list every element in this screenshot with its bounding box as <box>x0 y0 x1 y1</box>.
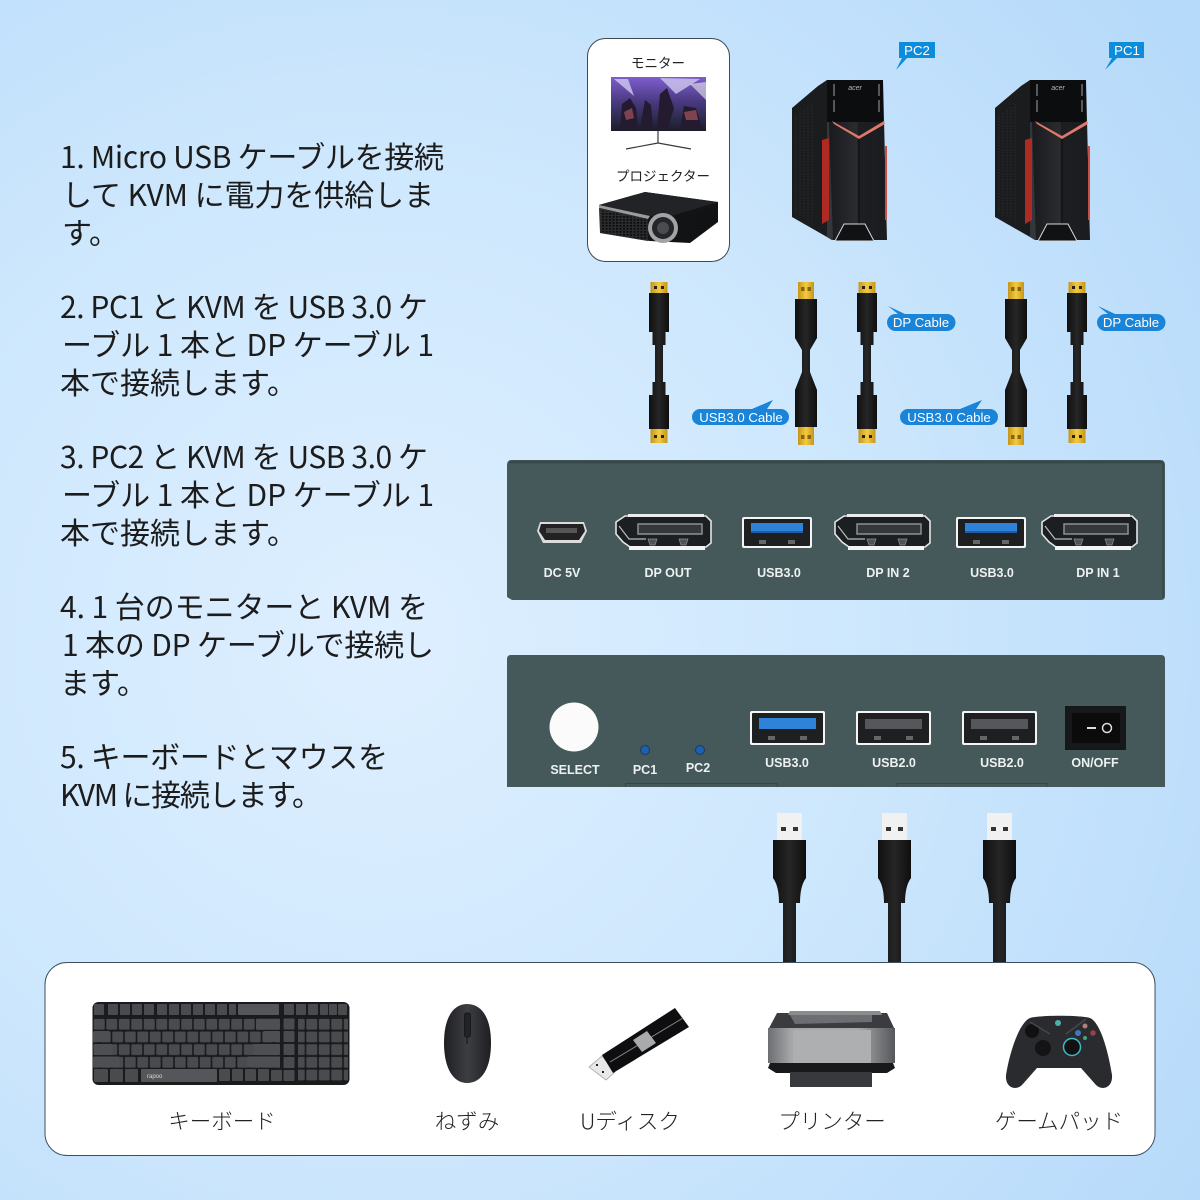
cable: DP to display <box>649 282 669 443</box>
panel: peripherals <box>45 962 1155 1156</box>
cable: DP PC2 <box>857 282 877 443</box>
port: DP OUT <box>616 514 711 550</box>
step 3: 本で接続します。 <box>60 509 297 553</box>
step 4: ます。 <box>60 659 147 703</box>
function keys <box>94 1004 347 1015</box>
label: USB2.0: USB2.0 <box>872 756 916 770</box>
button: select <box>550 702 598 752</box>
bottom row <box>94 1069 269 1082</box>
callout: DP Cable PC2 <box>887 306 956 331</box>
icon: PC1 tower <box>995 80 1090 241</box>
port: USB2.0 <box>856 711 931 745</box>
callout: USB3.0 Cable PC2: USB3.0 Cable <box>699 410 783 425</box>
label: PC2: PC2 <box>686 761 710 775</box>
step 3: 3. PC2 と KVM を USB 3.0 ケ <box>60 433 428 477</box>
port: micro USB <box>537 522 587 543</box>
callout: PC1 <box>1105 42 1144 70</box>
label: DP IN 1: DP IN 1 <box>1076 566 1120 580</box>
label: keyboard: キーボード <box>168 1105 276 1136</box>
label: DP OUT: DP OUT <box>644 566 692 580</box>
instructions text <box>60 133 444 815</box>
port: USB3.0 <box>750 711 825 745</box>
icon: mouse <box>444 1004 491 1083</box>
label: DP IN 2: DP IN 2 <box>866 566 910 580</box>
port: DP IN 1 <box>1042 514 1137 550</box>
icon: PC2 tower <box>792 80 887 241</box>
callout: PC1: PC1 <box>1114 43 1140 58</box>
callout: DP Cable PC1 <box>1097 306 1166 331</box>
label: printer: プリンター <box>778 1105 886 1136</box>
panel: display devices <box>588 38 730 262</box>
step 4: 4. 1 台のモニターと KVM を <box>60 583 428 627</box>
port: USB2.0 <box>962 711 1037 745</box>
cable: USB to peripherals 1 <box>773 813 806 963</box>
step 5: KVM に接続します。 <box>60 771 322 815</box>
LED: PC1 <box>640 746 650 754</box>
step 2: 本で接続します。 <box>60 359 297 403</box>
step 2 <box>60 283 434 403</box>
port: DP IN 2 <box>835 514 930 550</box>
icon: printer <box>768 1011 895 1087</box>
label: USB3.0: USB3.0 <box>757 566 801 580</box>
label: projector: プロジェクター <box>616 165 710 185</box>
step 4: 1 本の DP ケーブルで接続し <box>62 621 434 665</box>
cable: USB3.0 PC2 <box>795 282 817 445</box>
label: USB3.0: USB3.0 <box>970 566 1014 580</box>
label: USB3.0: USB3.0 <box>765 756 809 770</box>
callout: USB3.0 Cable PC1 <box>900 400 998 425</box>
LED: PC2 <box>696 746 704 754</box>
step 1 <box>60 133 444 253</box>
label: PC1: PC1 <box>633 763 657 777</box>
cable: USB3.0 PC1 <box>1005 282 1027 445</box>
icon: keyboard <box>92 1002 350 1085</box>
icon: gamepad <box>1006 1016 1112 1088</box>
icon: monitor <box>611 77 706 149</box>
keyboard brand: rapoo <box>147 1074 163 1080</box>
label: monitor: モニター <box>631 52 685 72</box>
label: SELECT: SELECT <box>550 763 600 777</box>
step 1: して KVM に電力を供給しま <box>62 171 434 215</box>
numeric keypad <box>298 1018 348 1082</box>
port: USB3.0 <box>742 517 812 548</box>
callout: DP Cable PC1: DP Cable <box>1103 315 1159 330</box>
step 5 <box>60 733 388 815</box>
step 3 <box>60 433 434 553</box>
panel: KVM front <box>507 655 1165 787</box>
icon: projector <box>599 192 718 243</box>
step 3: ーブル 1 本と DP ケーブル 1 <box>62 471 434 515</box>
callout: PC2 <box>896 42 935 70</box>
cable: DP PC1 <box>1067 282 1087 443</box>
step 1: す。 <box>62 209 119 253</box>
step 2: ーブル 1 本と DP ケーブル 1 <box>62 321 434 365</box>
callout: USB3.0 Cable PC2 <box>692 400 789 425</box>
callout: USB3.0 Cable PC1: USB3.0 Cable <box>907 410 991 425</box>
step 1: 1. Micro USB ケーブルを接続 <box>60 133 444 177</box>
step 2: 2. PC1 と KVM を USB 3.0 ケ <box>60 283 428 327</box>
main keys <box>93 1018 280 1069</box>
label: USB2.0: USB2.0 <box>980 756 1024 770</box>
port: USB3.0 <box>956 517 1026 548</box>
label: gamepad: ゲームパッド <box>995 1105 1123 1136</box>
label: ON/OFF: ON/OFF <box>1071 756 1119 770</box>
cable: USB to peripherals 2 <box>878 813 911 963</box>
cable: USB to peripherals 3 <box>983 813 1016 963</box>
step 4 <box>60 583 434 703</box>
label: mouse: ねずみ <box>435 1105 499 1136</box>
wide keys <box>94 1019 280 1068</box>
step 5: 5. キーボードとマウスを <box>60 733 388 777</box>
callout: PC2: PC2 <box>904 43 930 58</box>
label: USB drive: Uディスク <box>580 1105 680 1136</box>
icon: USB drive <box>589 1008 689 1080</box>
label: DC 5V: DC 5V <box>544 566 581 580</box>
switch: on/off <box>1065 706 1126 750</box>
callout: DP Cable PC2: DP Cable <box>893 315 949 330</box>
panel: KVM rear <box>507 460 1165 600</box>
navigation keys <box>271 1018 294 1081</box>
